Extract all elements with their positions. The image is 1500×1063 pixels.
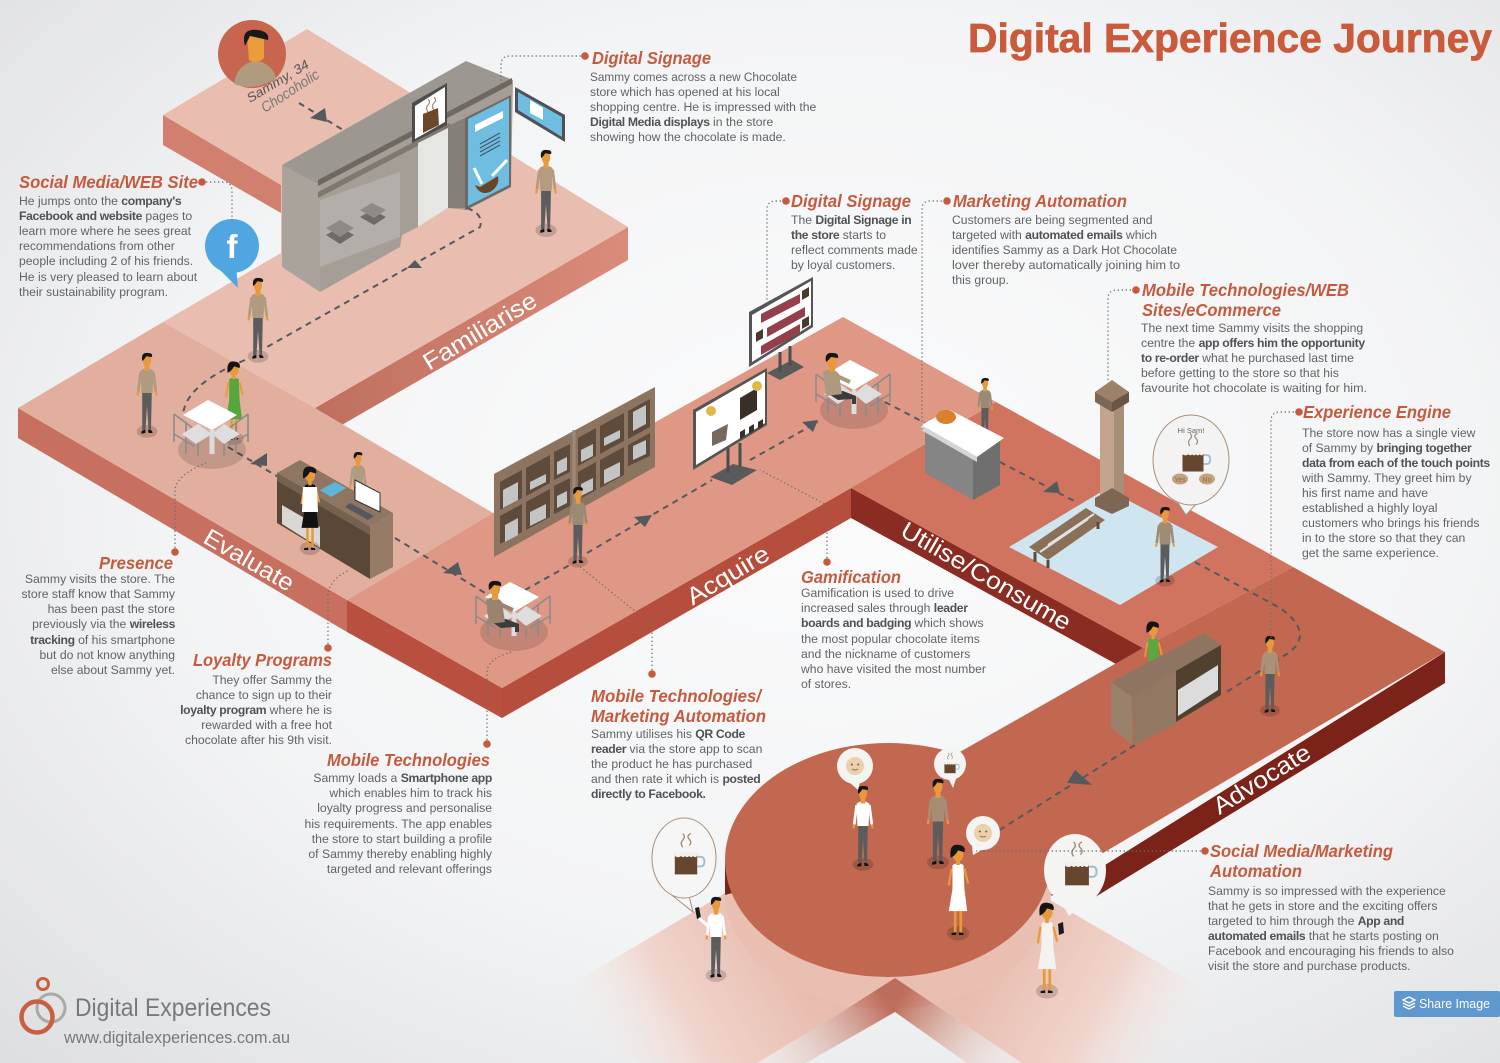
block: Digital Signage 1: Sammy comes across a new Chocolate — [590, 70, 797, 84]
block: Presence: but do not know anything — [39, 648, 175, 662]
block: Social Media/Marketing Automation: visit the store and purchase products. — [1208, 959, 1411, 973]
person near door — [535, 150, 557, 237]
blue poster — [465, 95, 511, 210]
block: Gamification: who have visited the most number — [800, 662, 986, 676]
block: Loyalty Programs: rewarded with a free hot — [201, 718, 333, 732]
bubble: face 2 — [966, 816, 1000, 855]
block: Digital Signage 2: the store starts to — [791, 228, 886, 242]
speech bubble: Hi Sam: Yes — [1174, 477, 1186, 484]
block: Experience Engine: The store now has a single view — [1302, 426, 1476, 440]
block: Mobile Technologies/Marketing Automation: directly to Facebook. — [591, 787, 706, 801]
block: Presence: has been past the store — [48, 602, 175, 616]
pillar — [1095, 380, 1129, 514]
logo: Digital Experiences — [75, 994, 271, 1022]
block: Experience Engine: customers who brings his friends — [1302, 516, 1479, 530]
block: Social Media/WEB Site: learn more where he sees great — [19, 224, 192, 238]
person standing — [137, 353, 157, 438]
block: Mobile Technologies/Marketing Automation: Mobile Technologies/ — [591, 686, 763, 706]
store window — [320, 172, 400, 267]
block: Mobile Technologies: his requirements. The app enables — [305, 817, 492, 831]
block: Presence: previously via the wireless — [32, 617, 176, 631]
table 1 — [174, 400, 248, 469]
block: Gamification: Gamification — [801, 567, 901, 587]
block: Social Media/Marketing Automation: Social Media/Marketing — [1210, 841, 1393, 861]
block: Mobile Technologies/WEB Sites: to re-order what he purchased last time — [1141, 351, 1354, 365]
block: Presence: tracking of his smartphone — [30, 633, 175, 647]
platform: advocate — [900, 567, 1445, 902]
block: Presence: else about Sammy yet. — [51, 663, 175, 677]
circular platform — [725, 743, 1051, 1063]
block: Loyalty Programs: chocolate after his 9th visit. — [185, 733, 332, 747]
lower faded platform wings — [540, 893, 1240, 1063]
stage label: Familiarise: Familiarise — [418, 287, 542, 376]
bubble: white cup — [1044, 834, 1106, 916]
block: Digital Signage 1 — [590, 48, 816, 144]
block: Social Media/Marketing Automation — [1208, 841, 1454, 973]
person with phone at left — [695, 897, 726, 982]
person in white shirt — [853, 786, 873, 871]
block: Digital Signage 2: reflect comments made — [791, 243, 918, 257]
block: Marketing Automation: Customers are being segmented and — [952, 213, 1153, 227]
block: Social Media/Marketing Automation: Facebook and encouraging his friends to also — [1208, 944, 1454, 958]
person at shelves — [568, 487, 588, 568]
block: Mobile Technologies/Marketing Automation: Sammy utilises his QR Code — [591, 727, 746, 741]
block: Social Media/WEB Site: their sustainability program. — [19, 285, 168, 299]
counter monitor — [355, 480, 380, 512]
block: Marketing Automation: identifies Sammy as a Dark Hot Chocolate — [952, 243, 1177, 257]
block: Mobile Technologies/Marketing Automation: and then rate it which is posted — [591, 772, 760, 786]
block: Mobile Technologies/WEB Sites: The next time Sammy visits the shopping — [1141, 321, 1363, 335]
seated table 2 — [476, 582, 550, 651]
board with comments — [749, 277, 813, 380]
block: Digital Signage 2: Digital Signage — [791, 191, 911, 211]
counter 2 — [1111, 633, 1221, 745]
block: Gamification: of stores. — [801, 677, 851, 691]
block: Digital Signage 2 — [791, 191, 918, 272]
stage label: Advocate: Advocate — [1208, 739, 1316, 820]
text: Chocoholic: Chocoholic — [258, 67, 323, 116]
block: Mobile Technologies: loyalty progress and personalise — [317, 801, 492, 815]
block: Experience Engine: his first name and have — [1302, 486, 1428, 500]
block: Social Media/Marketing Automation: Automation — [1209, 861, 1302, 881]
staff at island — [977, 378, 993, 442]
block: Social Media/WEB Site: Social Media/WEB Site — [19, 172, 198, 192]
block: Gamification: and the nickname of customers — [801, 647, 970, 661]
block: Mobile Technologies/WEB Sites: Sites/eCommerce — [1142, 300, 1281, 320]
seated person — [486, 581, 519, 632]
block: Social Media/Marketing Automation: targeted to him through the App and — [1208, 914, 1404, 928]
bench — [1029, 508, 1105, 568]
centre ridge bands — [757, 978, 1022, 1063]
block: Mobile Technologies/Marketing Automation — [591, 686, 766, 801]
woman in white dress — [947, 845, 969, 941]
person at pad — [1155, 507, 1175, 586]
block: Social Media/Marketing Automation: that he gets in store and the exciting offers — [1208, 899, 1437, 913]
journey dashed path — [183, 103, 1300, 836]
block: Experience Engine: Experience Engine — [1303, 402, 1451, 422]
speech bubble: Hi Sam: Hi Sam! — [1178, 426, 1204, 435]
block: Presence: store staff know that Sammy — [21, 587, 176, 601]
counter 1 — [277, 460, 393, 579]
block: Social Media/WEB Site: people including 2 of his friends. — [19, 254, 193, 268]
counter keyboard — [345, 503, 374, 520]
woman at counter — [300, 467, 320, 555]
block: Digital Signage 1: shopping centre. He is impressed with the — [590, 100, 816, 114]
staff behind counter — [349, 452, 367, 524]
logo — [22, 978, 290, 1047]
block: Mobile Technologies/WEB Sites: before getting to the store so that his — [1141, 366, 1339, 380]
speech bubble: Hi Sam — [1153, 415, 1229, 515]
block: Loyalty Programs: They offer Sammy the — [212, 673, 332, 687]
block: Experience Engine: with Sammy. They greet him by — [1301, 471, 1472, 485]
block: Gamification: Gamification is used to drive — [801, 586, 954, 600]
block: Loyalty Programs — [180, 650, 333, 747]
block: Digital Signage 1: store which has opened at his local — [590, 85, 780, 99]
block: Social Media/WEB Site: He is very pleased to learn about — [19, 270, 198, 284]
shelves — [494, 387, 655, 557]
block: Mobile Technologies/Marketing Automation: reader via the store app to scan — [591, 742, 762, 756]
share image button — [1394, 991, 1500, 1017]
block: Presence: Presence — [99, 553, 173, 573]
bubble: cup — [934, 748, 966, 788]
table 3 — [816, 360, 890, 429]
leaderboard with badge — [693, 368, 767, 485]
block: Mobile Technologies/WEB Sites: centre the app offers him the opportunity — [1141, 336, 1365, 350]
block: Mobile Technologies: which enables him to track his — [328, 786, 492, 800]
platform: familiarise — [163, 29, 628, 426]
block: Experience Engine: data from each of the touch points — [1302, 456, 1490, 470]
block: Gamification: the most popular chocolate items — [801, 632, 980, 646]
block: Mobile Technologies/WEB Sites: Mobile Technologies/WEB — [1142, 280, 1349, 300]
framed chocolate sign — [412, 83, 447, 143]
block: Marketing Automation: this group. — [952, 273, 1009, 287]
block: Digital Signage 1: Digital Signage — [592, 48, 711, 68]
logo: www.digitalexperiences.com.au — [63, 1029, 290, 1047]
person greeting — [1260, 636, 1280, 717]
block: Mobile Technologies — [305, 750, 493, 876]
block: Mobile Technologies: the store to start building a profile — [312, 832, 492, 846]
block: Mobile Technologies: Sammy loads a Smartphone app — [313, 771, 492, 785]
stage label: Utilise/Consume: Utilise/Consume — [896, 517, 1076, 636]
block: Marketing Automation — [952, 191, 1180, 287]
woman in green apron — [224, 361, 244, 445]
woman behind counter 2 — [1143, 621, 1163, 705]
stage label: Acquire: Acquire — [682, 540, 775, 611]
side screen — [515, 87, 565, 142]
text: Sammy, 34: Sammy, 34 — [244, 57, 312, 106]
avatar: Sammy — [218, 20, 286, 88]
block: Experience Engine: get the same experience. — [1302, 546, 1439, 560]
block: Social Media/WEB Site: recommendations from other — [19, 239, 175, 253]
facebook bubble — [205, 219, 259, 288]
block: Digital Signage 2: by loyal customers. — [791, 258, 895, 272]
share image button: Share Image — [1419, 996, 1490, 1011]
block: Social Media/Marketing Automation: automated emails that he starts posting on — [1208, 929, 1439, 943]
block: Marketing Automation: targeted with automated emails which — [952, 228, 1157, 242]
block: Loyalty Programs: loyalty program where he is — [180, 703, 332, 717]
block: Mobile Technologies: targeted and relevant offerings — [327, 862, 492, 876]
block: Mobile Technologies/WEB Sites: favourite hot chocolate is waiting for him. — [1141, 381, 1367, 395]
facebook bubble: f — [226, 228, 238, 265]
block: Loyalty Programs: chance to sign up to their — [196, 688, 332, 702]
store building — [282, 61, 565, 292]
block: Social Media/WEB Site — [19, 172, 198, 299]
seated person 3 — [823, 353, 856, 404]
bubble: outlined cup — [652, 818, 716, 912]
block: Gamification — [800, 567, 986, 691]
block: Marketing Automation: lover thereby automatically joining him to — [952, 258, 1180, 272]
person in brown top — [927, 779, 949, 869]
block: Digital Signage 2: The Digital Signage in — [791, 213, 911, 227]
block: Mobile Technologies: of Sammy thereby enabling highly — [308, 847, 493, 861]
store door — [418, 128, 448, 227]
block: Experience Engine: of Sammy by bringing together — [1302, 441, 1472, 455]
block: Gamification: boards and badging which shows — [801, 616, 984, 630]
speech bubble: Hi Sam: No — [1203, 477, 1212, 484]
platform: acquire — [347, 317, 996, 718]
block: Mobile Technologies/Marketing Automation: the product he has purchased — [591, 757, 752, 771]
person with phone — [248, 278, 268, 363]
blue pad — [1009, 489, 1218, 605]
island counter — [921, 410, 1004, 500]
block: Experience Engine: established a highly loyal — [1302, 501, 1438, 515]
woman with phone — [1036, 903, 1064, 999]
block: Social Media/WEB Site: Facebook and website pages to — [19, 209, 192, 223]
platform: evaluate — [18, 322, 493, 632]
block: Mobile Technologies/Marketing Automation: Marketing Automation — [591, 706, 766, 726]
bubble: happy face — [837, 748, 873, 790]
block: Digital Signage 1: Digital Media displays in the store — [590, 115, 774, 129]
block: Mobile Technologies: Mobile Technologies — [327, 750, 490, 770]
platform: utilise — [851, 402, 1293, 664]
block: Experience Engine — [1301, 402, 1490, 560]
block: Experience Engine: in to the store so that they can — [1302, 531, 1465, 545]
counter tablet — [320, 482, 346, 497]
block: Presence — [21, 553, 176, 677]
block: Social Media/Marketing Automation: Sammy is so impressed with the experience — [1208, 884, 1446, 898]
title: Digital Experience Journey — [968, 15, 1492, 61]
block: Digital Signage 1: showing how the chocolate is made. — [590, 130, 786, 144]
connectors and dots — [171, 52, 1303, 855]
block: Gamification: increased sales through leader — [801, 601, 968, 615]
block: Presence: Sammy visits the store. The — [25, 572, 175, 586]
block: Marketing Automation: Marketing Automation — [953, 191, 1127, 211]
stage label: Evaluate: Evaluate — [199, 524, 299, 597]
block: Loyalty Programs: Loyalty Programs — [193, 650, 332, 670]
block: Social Media/WEB Site: He jumps onto the company's — [19, 194, 182, 208]
block: Mobile Technologies/WEB Sites — [1141, 280, 1367, 395]
